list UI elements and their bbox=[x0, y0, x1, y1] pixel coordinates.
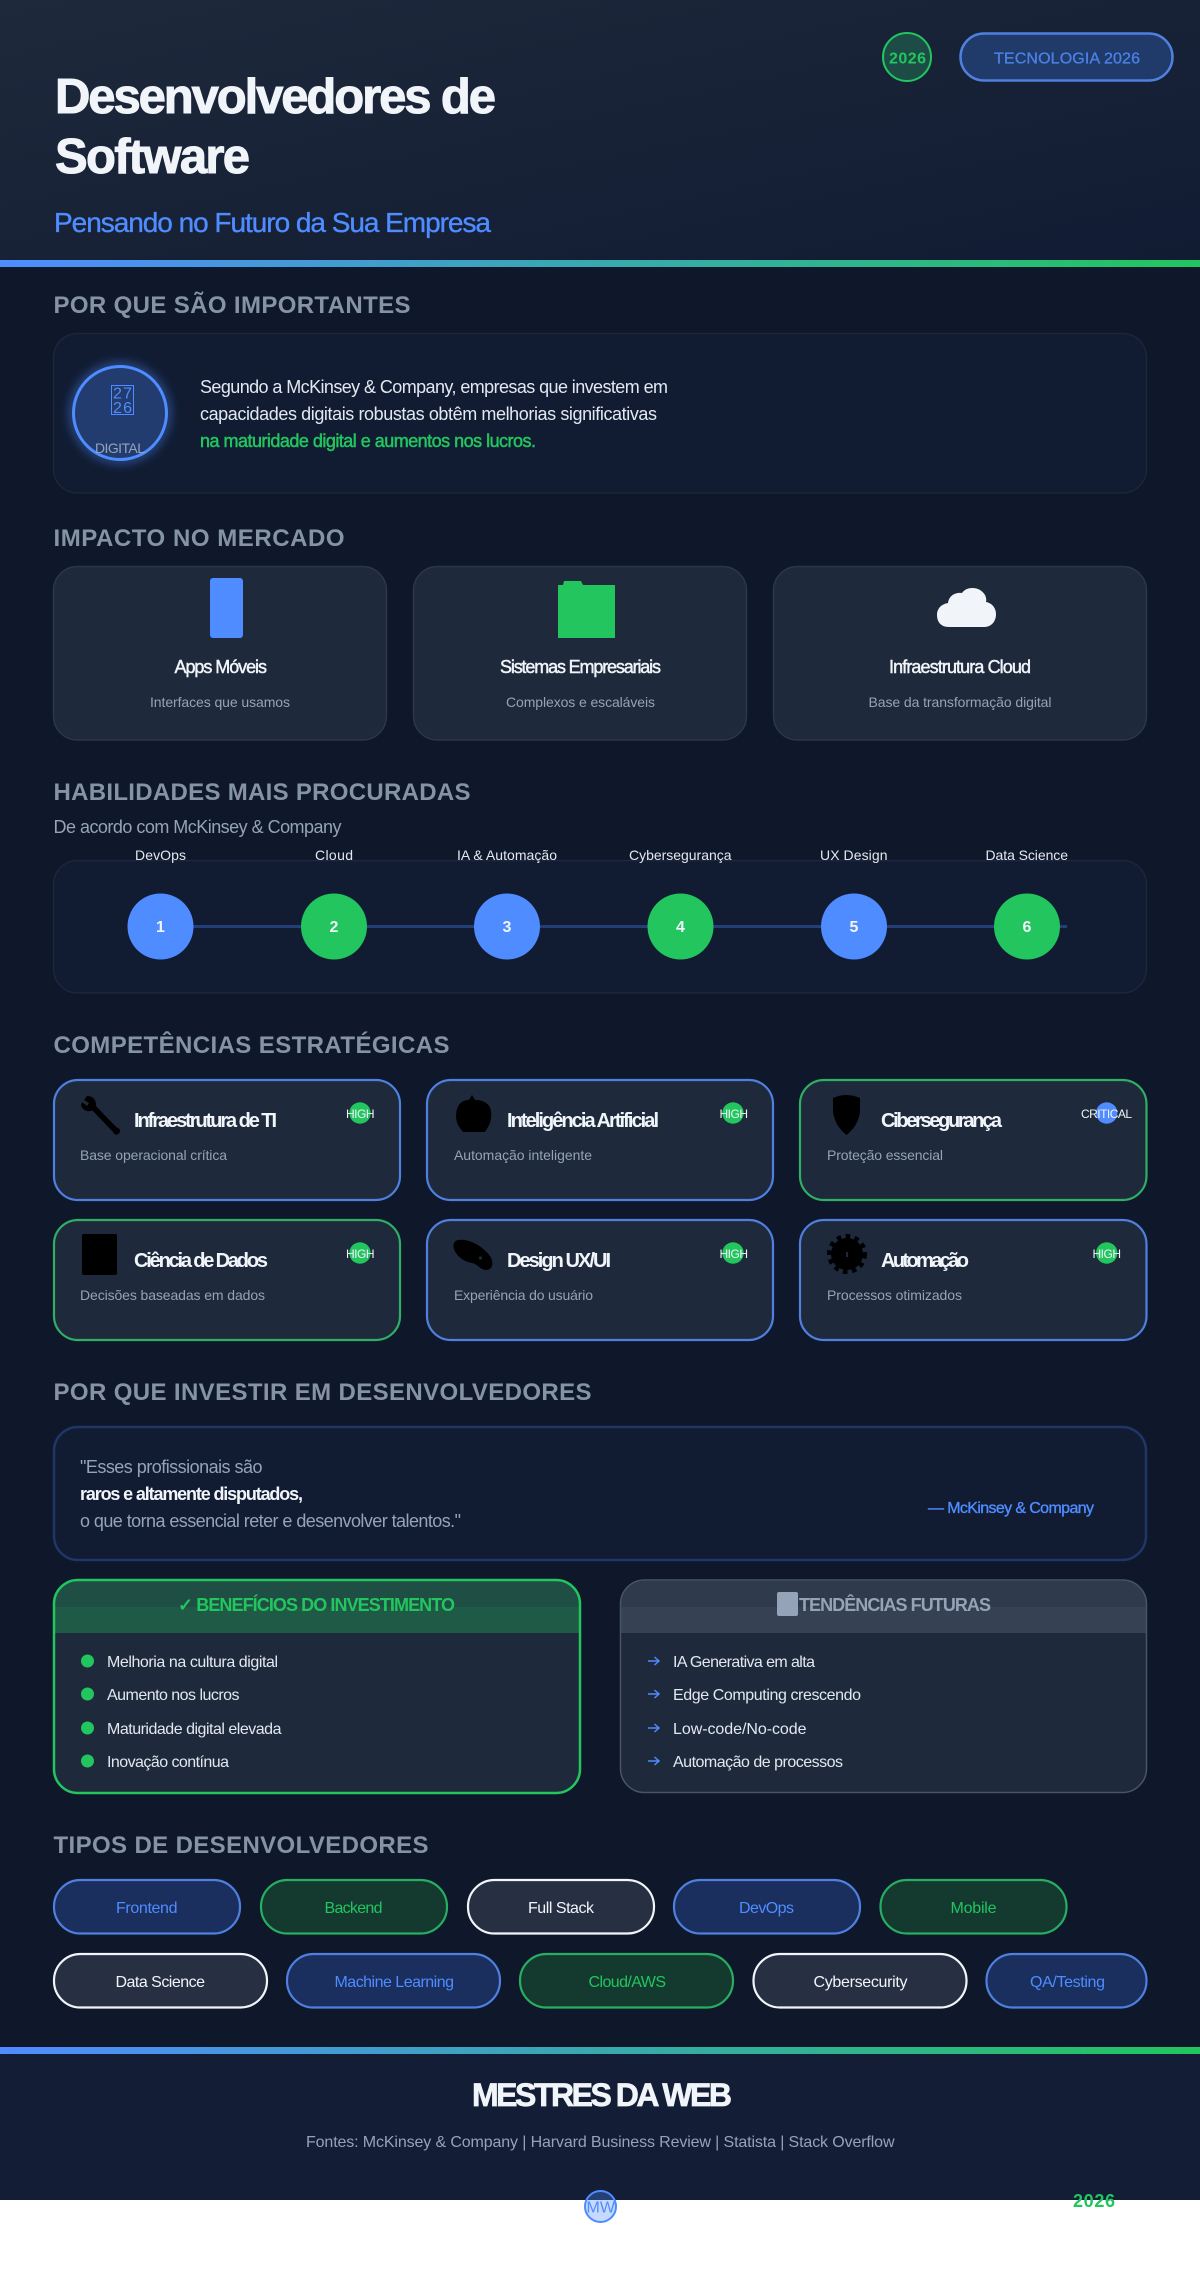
badge: 2026 bbox=[883, 33, 931, 81]
pill: full stack: Full Stack bbox=[528, 1900, 595, 1917]
card: inteligência artificial: Inteligência Artificial bbox=[507, 1110, 659, 1132]
panel: sistemas empresariais: Complexos e escaláveis bbox=[506, 694, 655, 710]
card: cibersegurança: Proteção essencial bbox=[827, 1147, 943, 1163]
step: ia: IA & Automação bbox=[457, 847, 557, 863]
panel: tendências bbox=[620, 1580, 1146, 1792]
step: devops: 1 bbox=[156, 919, 165, 936]
heading: impacto no mercado: IMPACTO NO MERCADO bbox=[54, 525, 344, 552]
card: design ux/ui: Experiência do usuário bbox=[454, 1287, 593, 1303]
quote text: o que torna essencial reter e desenvolver talentos." bbox=[80, 1511, 461, 1531]
card: inteligência artificial: Automação inteligente bbox=[454, 1147, 592, 1163]
list: benefícios bbox=[81, 1654, 282, 1771]
pill: mobile bbox=[880, 1880, 1066, 1934]
list: benefícios: Inovação contínua bbox=[107, 1754, 229, 1771]
text: mckinsey statement: Segundo a McKinsey & Company, empresas que investem em bbox=[200, 377, 668, 397]
pill: frontend bbox=[54, 1880, 240, 1934]
step: cybersegurança bbox=[629, 847, 732, 960]
card: cibersegurança: Cibersegurança bbox=[881, 1110, 1003, 1132]
card: infraestrutura de ti: Base operacional crítica bbox=[80, 1147, 227, 1163]
title: Software bbox=[55, 130, 250, 184]
card: infraestrutura de ti: Infraestrutura de TI bbox=[134, 1110, 277, 1132]
badge: HIGH bbox=[720, 1247, 748, 1261]
card: automação bbox=[800, 1220, 1146, 1340]
subheading: mckinsey: De acordo com McKinsey & Company bbox=[54, 817, 342, 837]
icon: folder bbox=[558, 581, 615, 638]
panel: quote bbox=[54, 1427, 1146, 1560]
heading: tipos: TIPOS DE DESENVOLVEDORES bbox=[54, 1832, 428, 1859]
step: data science: Data Science bbox=[986, 847, 1068, 863]
gradient bar bbox=[0, 260, 1200, 267]
icon: digital circle: 27 bbox=[113, 386, 132, 402]
list: benefícios: Maturidade digital elevada bbox=[107, 1721, 282, 1738]
list: tendências: Low-code/No-code bbox=[673, 1721, 807, 1738]
panel: infraestrutura cloud: Base da transformação digital bbox=[868, 694, 1052, 710]
card: ciência de dados bbox=[54, 1220, 400, 1340]
pill: backend bbox=[261, 1880, 447, 1934]
pill: machine learning bbox=[287, 1954, 500, 2008]
badge bbox=[1081, 1102, 1132, 1124]
heading: por que são importantes: POR QUE SÃO IMPORTANTES bbox=[54, 291, 410, 319]
step: cloud bbox=[301, 847, 367, 960]
pill: cybersecurity bbox=[754, 1954, 966, 2008]
card: automação: Automação bbox=[881, 1250, 969, 1272]
list: tendências: Automação de processos bbox=[673, 1754, 843, 1771]
icon: brain bbox=[456, 1095, 491, 1132]
pill: qa/testing: QA/Testing bbox=[1030, 1974, 1105, 1991]
card: infraestrutura de ti bbox=[54, 1080, 400, 1200]
card: ciência de dados: Ciência de Dados bbox=[134, 1250, 268, 1272]
icon: data block bbox=[82, 1234, 117, 1275]
logo: mw bbox=[585, 2191, 616, 2222]
subtitle: Pensando no Futuro da Sua Empresa bbox=[54, 207, 491, 238]
panel: apps móveis bbox=[54, 566, 386, 740]
heading: por que investir: POR QUE INVESTIR EM DESENVOLVEDORES bbox=[54, 1379, 592, 1406]
panel: sistemas empresariais bbox=[414, 566, 746, 740]
pill: backend: Backend bbox=[324, 1900, 382, 1917]
pill: data science: Data Science bbox=[116, 1974, 205, 1991]
sources: Fontes: McKinsey & Company | Harvard Business Review | Statista | Stack Overflow bbox=[306, 2134, 895, 2151]
pill: cloud/aws: Cloud/AWS bbox=[588, 1974, 666, 1991]
panel: benefícios bbox=[54, 1580, 580, 1793]
badge: 2026: 2026 bbox=[889, 50, 926, 68]
step: cloud: Cloud bbox=[315, 847, 353, 863]
card: automação: Processos otimizados bbox=[827, 1287, 962, 1303]
badge: tecnologia 2026 bbox=[960, 34, 1172, 80]
step: data science bbox=[986, 847, 1068, 960]
pill: devops bbox=[674, 1880, 860, 1934]
badge bbox=[346, 1242, 374, 1264]
step: cybersegurança: Cybersegurança bbox=[629, 847, 732, 863]
quote text bbox=[80, 1457, 461, 1531]
title bbox=[55, 70, 496, 184]
panel: apps móveis: Apps Móveis bbox=[174, 657, 267, 677]
badge bbox=[720, 1102, 748, 1124]
icon: gear bbox=[830, 1236, 864, 1272]
badge: HIGH bbox=[1092, 1247, 1121, 1261]
card: design ux/ui: Design UX/UI bbox=[507, 1250, 611, 1272]
icon: digital circle: 26 bbox=[113, 400, 132, 417]
badge: HIGH bbox=[346, 1247, 374, 1261]
text: mckinsey statement bbox=[200, 377, 668, 451]
title: Desenvolvedores de bbox=[55, 70, 496, 124]
icon: cloud bbox=[937, 588, 996, 627]
step: devops: DevOps bbox=[135, 847, 186, 863]
attribution: — McKinsey & Company bbox=[928, 1500, 1094, 1517]
pill: frontend: Frontend bbox=[116, 1900, 178, 1917]
badge: CRITICAL bbox=[1081, 1107, 1132, 1121]
pill: machine learning: Machine Learning bbox=[334, 1974, 454, 1991]
panel: digital bbox=[54, 334, 1146, 493]
icon: phone bbox=[210, 578, 243, 638]
step: ux: 5 bbox=[850, 919, 859, 936]
heading: habilidades: HABILIDADES MAIS PROCURADAS bbox=[54, 779, 470, 806]
icon: wrench bbox=[81, 1096, 120, 1135]
pill: full stack bbox=[468, 1880, 654, 1934]
list: tendências: Edge Computing crescendo bbox=[673, 1687, 861, 1704]
icon: shield bbox=[833, 1095, 860, 1135]
step: cloud: 2 bbox=[330, 919, 339, 936]
step: ux bbox=[820, 847, 888, 960]
panel: infraestrutura cloud bbox=[774, 566, 1146, 740]
text: mckinsey statement: na maturidade digital e aumentos nos lucros. bbox=[200, 431, 536, 451]
list: tendências bbox=[648, 1654, 861, 1771]
quote text: raros e altamente disputados, bbox=[80, 1484, 303, 1504]
footer brand: MESTRES DA WEB bbox=[472, 2077, 732, 2113]
card: inteligência artificial bbox=[427, 1080, 773, 1200]
icon: palette bbox=[454, 1240, 492, 1270]
card: ciência de dados: Decisões baseadas em dados bbox=[80, 1287, 265, 1303]
card: design ux/ui bbox=[427, 1220, 773, 1340]
list: tendências: IA Generativa em alta bbox=[673, 1654, 815, 1671]
step: devops bbox=[128, 847, 194, 960]
heading: benefícios: ✓ BENEFÍCIOS DO INVESTIMENTO bbox=[178, 1594, 455, 1615]
footer bbox=[0, 2047, 1200, 2222]
pills: tipos de desenvolvedores bbox=[54, 1880, 1146, 2008]
quote text: "Esses profissionais são bbox=[80, 1457, 262, 1477]
pill: cloud/aws bbox=[520, 1954, 733, 2008]
pill: data science bbox=[54, 1954, 267, 2008]
panel: infraestrutura cloud: Infraestrutura Cloud bbox=[889, 657, 1031, 677]
step: cybersegurança: 4 bbox=[676, 919, 685, 936]
pill: devops: DevOps bbox=[739, 1900, 794, 1917]
badge bbox=[1092, 1242, 1121, 1264]
list: benefícios: Aumento nos lucros bbox=[107, 1687, 240, 1704]
badge bbox=[720, 1242, 748, 1264]
year: 2026 bbox=[1073, 2191, 1115, 2211]
pill: cybersecurity: Cybersecurity bbox=[814, 1974, 908, 1991]
icon: digital circle: DIGITAL bbox=[95, 440, 145, 456]
card: cibersegurança bbox=[800, 1080, 1146, 1200]
badge: HIGH bbox=[346, 1107, 374, 1121]
list: benefícios: Melhoria na cultura digital bbox=[107, 1654, 278, 1671]
heading: tendências: TENDÊNCIAS FUTURAS bbox=[799, 1594, 991, 1615]
heading: competências: COMPETÊNCIAS ESTRATÉGICAS bbox=[54, 1031, 450, 1059]
badge bbox=[346, 1102, 374, 1124]
step: ia bbox=[457, 847, 557, 960]
text: mckinsey statement: capacidades digitais robustas obtêm melhorias significativas bbox=[200, 404, 657, 424]
badge: tecnologia 2026: TECNOLOGIA 2026 bbox=[994, 50, 1140, 68]
panel: apps móveis: Interfaces que usamos bbox=[150, 694, 290, 710]
logo: mw: MW bbox=[586, 2200, 616, 2216]
panel: skills timeline bbox=[54, 847, 1146, 993]
step: ux: UX Design bbox=[820, 847, 888, 863]
header bbox=[0, 0, 1200, 260]
pill: qa/testing bbox=[986, 1954, 1146, 2008]
step: data science: 6 bbox=[1023, 919, 1032, 936]
icon: digital circle bbox=[73, 366, 167, 460]
pill: mobile: Mobile bbox=[950, 1900, 997, 1917]
panel: sistemas empresariais: Sistemas Empresariais bbox=[500, 657, 661, 677]
step: ia: 3 bbox=[503, 919, 512, 936]
badge: HIGH bbox=[720, 1107, 748, 1121]
